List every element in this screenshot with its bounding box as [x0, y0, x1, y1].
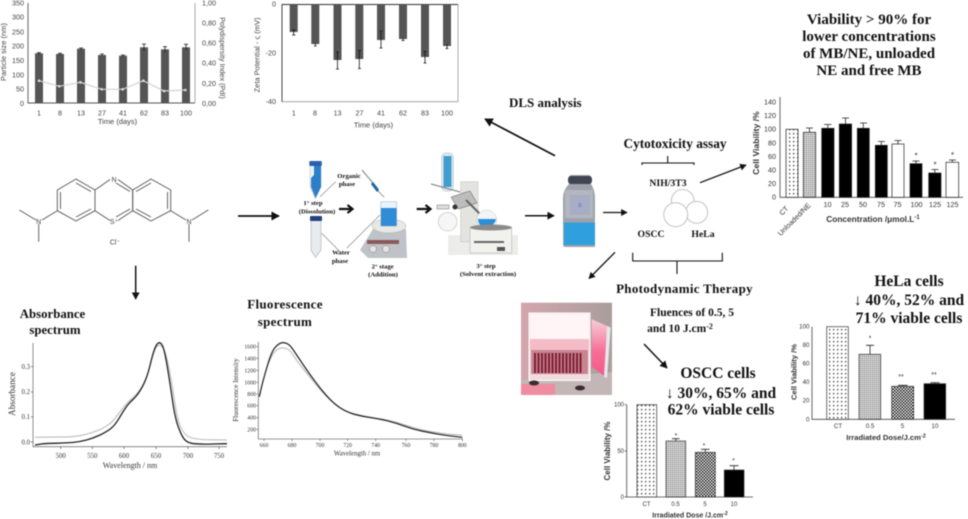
- arrow: fluences to OSCC result: [644, 344, 667, 368]
- chart: zeta potential over time: Zeta Potential - ς (mV): [252, 17, 262, 92]
- arrow: bottle to phototherapy device: [589, 252, 615, 278]
- line chart: fluorescence spectrum: Wavelength / nm: [334, 450, 381, 458]
- bar chart: OSCC viability by irradiated dose: 0.5: [671, 502, 680, 508]
- bar chart: OSCC viability by irradiated dose: CT: [642, 502, 651, 508]
- bar chart: cell viability by concentration: 120: [764, 111, 776, 120]
- arrow: bottle to assays: [603, 212, 627, 214]
- chart: particle size and polydispersity over time: 200: [12, 42, 24, 50]
- bar chart: cell viability by concentration: 100: [764, 125, 776, 134]
- arrow: bottle to DLS analysis: [485, 119, 555, 156]
- chart: particle size and polydispersity over time: 0,20: [202, 79, 216, 88]
- chart: zeta potential over time: [252, 0, 458, 130]
- rotary evaporator: [431, 153, 518, 255]
- line chart: absorbance spectrum: [7, 343, 227, 470]
- methylene blue molecule: N: [111, 177, 117, 184]
- process labels: phase: [332, 258, 348, 265]
- bar chart: cell viability by concentration: 140: [764, 98, 776, 106]
- chart: zeta potential over time: Time (days): [354, 120, 394, 130]
- bar chart: HeLa viability by irradiated dose: *: [869, 336, 872, 342]
- chart: zeta potential over time: 8: [313, 108, 317, 118]
- bar chart: cell viability by concentration: -1: [914, 215, 920, 221]
- chart: zeta potential over time: 13: [334, 108, 342, 118]
- methylene blue molecule: Cl⁻: [110, 240, 120, 246]
- bar chart: cell viability by concentration: 50: [859, 200, 867, 209]
- cytotoxicity heading: Cytotoxicity assay: [623, 136, 727, 151]
- line chart: fluorescence spectrum: 760: [402, 443, 410, 449]
- bar chart: HeLa viability by irradiated dose: 80: [803, 342, 810, 349]
- preparation process illustration: [299, 153, 518, 278]
- process arrows: [339, 205, 430, 213]
- viability summary heading: lower concentrations: [802, 29, 936, 45]
- line chart: absorbance spectrum: Absorbance: [7, 372, 17, 416]
- fluences text: [647, 307, 734, 335]
- chart: zeta potential over time: -20: [266, 48, 276, 58]
- OSCC result text: 62% viable cells: [668, 402, 774, 418]
- bar chart: HeLa viability by irradiated dose: 5: [901, 423, 905, 430]
- bar chart: cell viability by concentration: *: [914, 152, 918, 160]
- bar chart: cell viability by concentration: 10: [824, 200, 832, 209]
- line chart: absorbance spectrum: 0.0: [22, 440, 31, 446]
- process labels: (Addition): [368, 272, 398, 278]
- chart: particle size and polydispersity over time: 1: [37, 108, 41, 118]
- line chart: fluorescence spectrum: 680: [288, 443, 296, 449]
- OSCC result text: ↓ 30%, 65% and: [666, 385, 776, 402]
- chart: zeta potential over time: -40: [266, 97, 276, 106]
- bar chart: cell viability by concentration: 25: [841, 200, 849, 209]
- cytotoxicity assay group: [623, 136, 727, 240]
- fluorescence spectrum heading: Fluorescence: [247, 296, 323, 312]
- arrow: molecule to preparation: [238, 215, 279, 217]
- bar chart: OSCC viability by irradiated dose: *: [732, 458, 735, 465]
- bar chart: OSCC viability by irradiated dose: Cell Viability /%: [603, 422, 612, 480]
- bar chart: cell viability by concentration: 40: [768, 166, 776, 174]
- bar chart: HeLa viability by irradiated dose: Cell Viability /%: [790, 344, 798, 400]
- fluorescence spectrum heading: [247, 296, 323, 329]
- line chart: fluorescence spectrum: 800: [458, 443, 467, 449]
- bar chart: HeLa viability by irradiated dose: 60: [803, 360, 810, 368]
- bar chart: OSCC viability by irradiated dose: [603, 403, 753, 519]
- bar chart: HeLa viability by irradiated dose: **: [898, 374, 904, 381]
- methylene blue molecule: N: [186, 219, 192, 226]
- bar chart: OSCC viability by irradiated dose: 5: [703, 502, 707, 508]
- step 1 tubes: [309, 161, 380, 258]
- bar chart: OSCC viability by irradiated dose: *: [675, 433, 678, 440]
- line chart: absorbance spectrum: 650: [151, 453, 162, 460]
- process labels: (Solvent extraction): [460, 271, 516, 278]
- fluences text: Fluences of 0.5, 5: [650, 307, 734, 319]
- cell line labels: HeLa: [691, 229, 715, 240]
- process labels: 1° step: [303, 200, 323, 207]
- line chart: fluorescence spectrum: 1200: [244, 368, 256, 374]
- chart: particle size and polydispersity over time: 62: [140, 108, 148, 118]
- line chart: fluorescence spectrum: 800: [247, 392, 256, 398]
- bar chart: cell viability by concentration: *: [951, 151, 954, 160]
- cell line labels: NIH/3T3: [649, 178, 687, 189]
- bar chart: cell viability by concentration: 75: [894, 200, 902, 209]
- arrow: molecule to absorbance spectrum: [135, 266, 137, 299]
- viability summary heading: of MB/NE, unloaded: [803, 46, 936, 62]
- bar chart: OSCC viability by irradiated dose: 100: [614, 403, 625, 409]
- bar chart: cell viability by concentration: *: [933, 160, 937, 170]
- bar chart: HeLa viability by irradiated dose: 20: [803, 398, 810, 405]
- bar chart: cell viability by concentration: 60: [768, 152, 776, 161]
- chart: particle size and polydispersity over time: Time (days): [98, 117, 138, 126]
- chart: zeta potential over time: 62: [399, 108, 407, 118]
- line chart: fluorescence spectrum: 1400: [244, 356, 256, 362]
- chart: particle size and polydispersity over time: 0,60: [202, 38, 216, 48]
- line chart: fluorescence spectrum: 400: [247, 416, 256, 422]
- bar chart: OSCC viability by irradiated dose: 50: [617, 449, 625, 455]
- bar chart: cell viability by concentration: 80: [768, 138, 776, 148]
- chart: particle size and polydispersity over time: 41: [119, 108, 127, 118]
- line chart: fluorescence spectrum: 700: [316, 443, 324, 449]
- viability summary heading: Viability > 90% for: [807, 12, 931, 28]
- chart: zeta potential over time: 83: [421, 108, 429, 118]
- bar chart: cell viability by concentration: 125: [929, 200, 941, 209]
- line chart: fluorescence spectrum: 1000: [244, 380, 256, 386]
- chart: particle size and polydispersity over time: 300: [12, 12, 24, 22]
- chart: particle size and polydispersity over time: 0,80: [202, 18, 216, 28]
- chart: particle size and polydispersity over time: [0, 0, 227, 126]
- bar chart: HeLa viability by irradiated dose: 10: [932, 423, 939, 430]
- line chart: absorbance spectrum: 0.1: [22, 414, 30, 421]
- absorbance spectrum heading: spectrum: [29, 323, 81, 337]
- bar chart: cell viability by concentration: [751, 97, 963, 238]
- chart: particle size and polydispersity over time: 100: [180, 108, 192, 118]
- bar chart: OSCC viability by irradiated dose: 0: [621, 495, 625, 501]
- HeLa result text: 71% viable cells: [856, 310, 962, 327]
- line chart: fluorescence spectrum: 660: [260, 443, 268, 449]
- cell line circles: [664, 189, 708, 227]
- fluences text: and 10 J.cm: [647, 323, 706, 335]
- bar chart: HeLa viability by irradiated dose: 0.5: [866, 423, 875, 430]
- line chart: fluorescence spectrum: 600: [247, 404, 256, 410]
- HeLa result text: HeLa cells: [874, 273, 944, 290]
- process labels: [299, 173, 516, 278]
- chart: particle size and polydispersity over time: 0: [20, 99, 24, 108]
- OSCC result text: [666, 365, 776, 418]
- chart: particle size and polydispersity over time: 150: [12, 56, 24, 65]
- arrow: evaporator to bottle: [525, 215, 554, 217]
- line chart: fluorescence spectrum: 720: [343, 443, 352, 449]
- line chart: fluorescence spectrum: 740: [371, 443, 380, 449]
- chart: particle size and polydispersity over time: 83: [161, 108, 169, 118]
- fluorescence spectrum heading: spectrum: [258, 314, 312, 329]
- HeLa result text: ↓ 40%, 52% and: [854, 292, 964, 309]
- bar chart: HeLa viability by irradiated dose: -2: [921, 434, 926, 440]
- process labels: (Dissolution): [299, 208, 335, 216]
- bar chart: cell viability by concentration: 75: [877, 200, 885, 209]
- process labels: 2° stage: [372, 264, 394, 270]
- bar chart: HeLa viability by irradiated dose: 0: [806, 416, 810, 424]
- OSCC result text: OSCC cells: [680, 365, 756, 382]
- chart: zeta potential over time: 100: [441, 108, 453, 118]
- viability summary heading: NE and free MB: [816, 63, 922, 79]
- process labels: Organic: [337, 173, 361, 180]
- bar chart: cell viability by concentration: Concentration /μmol.L: [826, 214, 914, 224]
- bar chart: HeLa viability by irradiated dose: CT: [834, 423, 842, 430]
- line chart: absorbance spectrum: 0.3: [22, 364, 31, 371]
- line chart: fluorescence spectrum: [232, 342, 467, 458]
- cell line labels: OSCC: [638, 229, 664, 240]
- bracket: cell lines to photodynamic therapy: [633, 253, 722, 274]
- bar chart: cell viability by concentration: 20: [768, 179, 776, 188]
- cell line labels: [638, 178, 715, 240]
- line chart: fluorescence spectrum: 780: [430, 443, 438, 449]
- photodynamic light device photo: [521, 303, 612, 395]
- HeLa result text: [854, 273, 964, 327]
- chart: particle size and polydispersity over time: 250: [12, 28, 24, 36]
- chart: zeta potential over time: 1: [292, 108, 296, 118]
- line chart: fluorescence spectrum: 1600: [244, 345, 256, 351]
- stirrer with beaker: [360, 202, 407, 258]
- bar chart: cell viability by concentration: 0: [772, 193, 776, 202]
- photodynamic therapy heading: Photodynamic Therapy: [616, 281, 753, 296]
- bar chart: HeLa viability by irradiated dose: **: [931, 372, 937, 379]
- DLS analysis label: DLS analysis: [509, 95, 582, 110]
- arrow: assay to viability chart: [700, 165, 746, 183]
- line chart: absorbance spectrum: 600: [119, 453, 130, 460]
- methylene blue molecule: N: [36, 219, 41, 226]
- bar chart: HeLa viability by irradiated dose: 100: [799, 324, 810, 331]
- bar chart: OSCC viability by irradiated dose: -2: [723, 511, 728, 517]
- line chart: absorbance spectrum: Wavelength / nm: [103, 461, 158, 470]
- chart: particle size and polydispersity over time: Polydispersity Index (PdI): [218, 17, 227, 99]
- process labels: phase: [339, 181, 355, 188]
- methylene blue molecule: [19, 177, 208, 246]
- bar chart: cell viability by concentration: 100: [910, 200, 922, 209]
- absorbance spectrum heading: Absorbance: [20, 307, 86, 321]
- bar chart: HeLa viability by irradiated dose: 40: [803, 379, 810, 386]
- fluences text: -2: [706, 322, 713, 331]
- bar chart: HeLa viability by irradiated dose: [790, 324, 955, 442]
- chart: particle size and polydispersity over time: 50: [16, 84, 24, 94]
- chart: particle size and polydispersity over time: 27: [98, 108, 106, 118]
- absorbance spectrum heading: [20, 307, 86, 337]
- bar chart: cell viability by concentration: CT: [777, 204, 791, 217]
- line chart: absorbance spectrum: 750: [214, 453, 225, 460]
- methylene blue molecule: S⁺: [110, 219, 118, 226]
- bar chart: cell viability by concentration: 125: [946, 200, 958, 209]
- line chart: fluorescence spectrum: Fluorescence Intensity: [232, 358, 240, 422]
- nanoemulsion bottle: [563, 175, 595, 247]
- chart: zeta potential over time: 27: [356, 108, 364, 118]
- nanoemulsion bottle: B: [578, 203, 582, 209]
- chart: particle size and polydispersity over time: 0,00: [202, 99, 216, 108]
- line chart: absorbance spectrum: 700: [183, 453, 194, 460]
- chart: particle size and polydispersity over time: 100: [12, 70, 24, 80]
- bar chart: HeLa viability by irradiated dose: Irradiated Dose/J.cm: [846, 433, 921, 442]
- bar chart: OSCC viability by irradiated dose: *: [703, 443, 706, 450]
- line chart: absorbance spectrum: 550: [87, 453, 98, 460]
- chart: particle size and polydispersity over time: 0,40: [202, 58, 216, 68]
- syringe: [362, 170, 384, 197]
- chart: particle size and polydispersity over time: 13: [77, 108, 85, 118]
- bar chart: cell viability by concentration: Unloaded/NE: [776, 201, 813, 238]
- process labels: 3° step: [476, 263, 496, 270]
- line chart: absorbance spectrum: 0.2: [22, 389, 31, 396]
- process labels: Water: [332, 250, 350, 256]
- bar chart: cell viability by concentration: Cell Viability /%: [751, 111, 761, 175]
- viability summary heading: [802, 12, 936, 79]
- line chart: absorbance spectrum: 500: [56, 453, 66, 460]
- line chart: fluorescence spectrum: 200: [247, 427, 256, 433]
- chart: zeta potential over time: 41: [377, 108, 385, 118]
- chart: particle size and polydispersity over time: 8: [58, 108, 62, 118]
- bar chart: OSCC viability by irradiated dose: 10: [731, 502, 738, 508]
